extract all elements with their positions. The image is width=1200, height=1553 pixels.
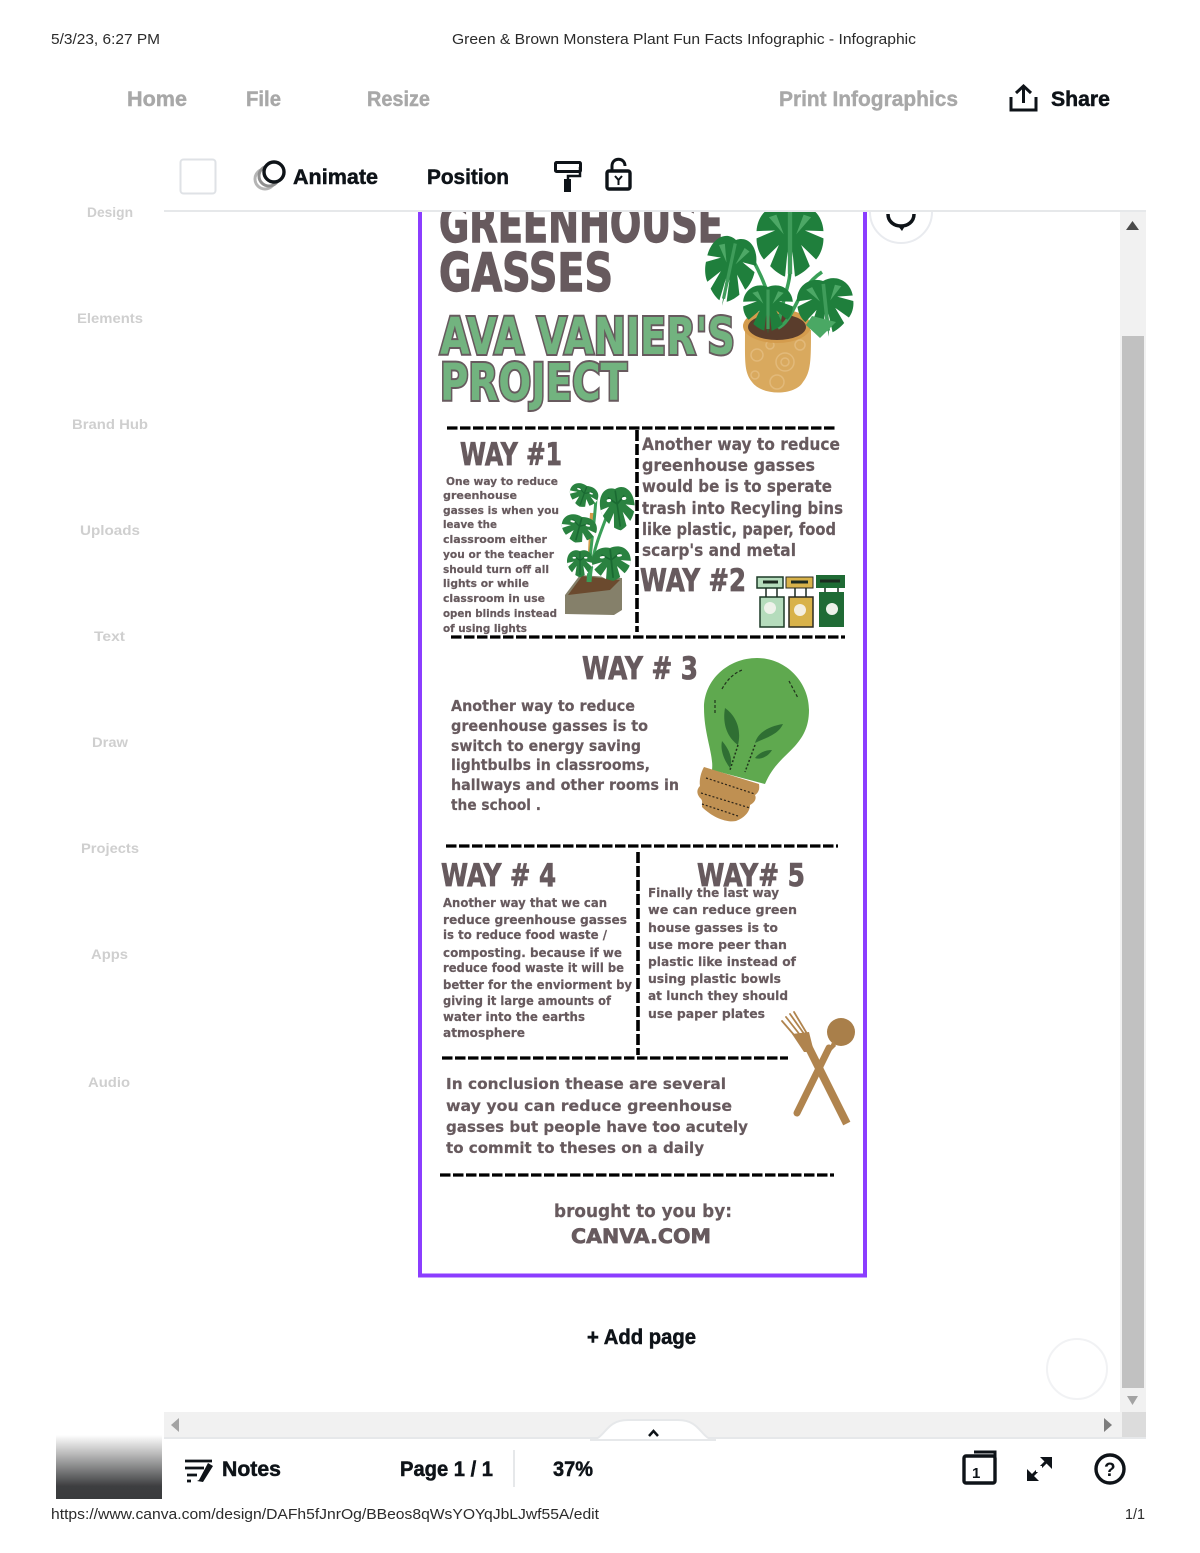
top navigation: Home [127, 88, 187, 111]
text: way 1: classroom in use [443, 592, 545, 605]
text: way 4: atmosphere [443, 1025, 525, 1040]
text: way 1: leave the [443, 518, 497, 531]
text: way 5: plastic like instead of [648, 954, 797, 969]
heading: way 2: WAY #2 [640, 563, 746, 599]
subtitle: ava vanier's project: PROJECT [440, 354, 627, 413]
infographic page [420, 181, 932, 1276]
text: way 4: giving it large amounts of [443, 993, 612, 1008]
page thumbnail [56, 1435, 162, 1499]
text: way 5: using plastic bowls [648, 971, 781, 986]
text: way 3: switch to energy saving [451, 737, 641, 755]
pdf page title: Green & Brown Monstera Plant Fun Facts Infographic - Infographic [452, 31, 917, 48]
sidebar labels [72, 204, 148, 1090]
credit: brought to you by: [554, 1201, 732, 1222]
animate label: Animate [293, 166, 378, 189]
text: way 1: One way to reduce [446, 475, 558, 488]
text: way 5: house gasses is to [648, 920, 778, 935]
heading: way 5: WAY# 5 [697, 858, 805, 894]
horizontal scrollbar [164, 1412, 1146, 1440]
heading: way 3: WAY # 3 [582, 651, 698, 687]
sidebar labels: Brand Hub [72, 416, 148, 432]
text: way 4: better for the enviorment by [443, 977, 632, 992]
text: way 2: would be is to sperate [642, 477, 832, 496]
text: way 5: at lunch they should [648, 988, 788, 1003]
sidebar labels: Elements [77, 310, 143, 326]
top navigation: Resize [367, 88, 430, 111]
position label: Position [427, 166, 509, 189]
animate icon [255, 162, 284, 189]
share button [1011, 86, 1110, 111]
text: way 1: of using lights [443, 622, 527, 635]
subtitle: ava vanier's project: AVA VANIER'S [440, 308, 735, 367]
toolbar rule [164, 210, 1146, 212]
text: way 3: greenhouse gasses is to [451, 717, 648, 735]
text: way 4: is to reduce food waste / [443, 927, 607, 942]
sidebar labels: Projects [81, 840, 139, 856]
text: way 4: Another way that we can [443, 895, 607, 910]
conclusion text: way you can reduce greenhouse [446, 1097, 732, 1115]
text: way 5: use more peer than [648, 937, 787, 952]
text: way 2: trash into Recyling bins [642, 499, 843, 518]
conclusion text: to commit to theses on a daily [446, 1139, 704, 1157]
text: way 4 [443, 895, 632, 1040]
panel: way 1 [443, 437, 638, 635]
conclusion text: In conclusion thease are several [446, 1075, 726, 1093]
credit [555, 1203, 730, 1244]
text: way 4: reduce food waste it will be [443, 960, 624, 975]
heading: way 4: WAY # 4 [441, 858, 556, 894]
pdf url footer: https://www.canva.com/design/DAFh5fJnrOg/BBeos8qWsYOYqJbLJwf55A/edit [51, 1506, 600, 1523]
text: way 4: reduce greenhouse gasses [443, 912, 627, 927]
top navigation: File [246, 88, 281, 111]
sidebar labels: Audio [88, 1074, 130, 1090]
sidebar labels: Text [94, 628, 125, 644]
sidebar labels: Draw [92, 734, 128, 750]
illustration: plant in square planter [558, 480, 638, 615]
share button: Share [1051, 88, 1110, 111]
credit: CANVA.COM [571, 1225, 711, 1248]
pdf print date: 5/3/23, 6:27 PM [51, 31, 160, 48]
icon: lock [607, 159, 630, 189]
text: way 2: greenhouse gasses [642, 456, 815, 475]
text: way 2: scarp's and metal [642, 541, 796, 560]
title: greenhouse gasses: GASSES [439, 243, 613, 304]
text: way 1: lights or while [443, 577, 529, 590]
illustration: green lightbulb [697, 658, 809, 821]
sidebar labels: Apps [91, 946, 128, 962]
icon: recycling bins [757, 575, 845, 627]
page indicator: Page 1 / 1 [400, 1458, 493, 1481]
text: way 1 [443, 475, 559, 635]
top navigation: Print Infographics [779, 88, 958, 111]
text: way 3: hallways and other rooms in [451, 776, 679, 794]
subtitle: ava vanier's project [440, 308, 735, 413]
illustration: potted monstera [698, 205, 857, 392]
pdf page number: 1/1 [1125, 1506, 1145, 1523]
text: way 2: like plastic, paper, food [642, 520, 836, 539]
text: way 1: gasses is when you [443, 504, 559, 517]
icon: notes [185, 1461, 213, 1482]
panel: way 5 [648, 858, 805, 1021]
icon: page count: 1 [972, 1465, 980, 1482]
icon: paint roller [556, 162, 580, 192]
sidebar labels: Uploads [80, 522, 140, 538]
text: way 5 [648, 885, 797, 1021]
purple selection frame [420, 190, 865, 1276]
text: way 4: water into the earths [443, 1009, 585, 1024]
panel: way 4 [441, 858, 632, 1040]
text: way 3 [451, 697, 679, 814]
icon: page count [964, 1452, 995, 1483]
text: way 3: lightbulbs in classrooms, [451, 756, 650, 774]
text: way 5: we can reduce green [648, 902, 797, 917]
panel: way 2 [640, 435, 845, 627]
toolbar [180, 159, 630, 194]
icon: floating comment button [869, 212, 933, 244]
heading: way 1: WAY #1 [460, 437, 562, 473]
icon: expand [1027, 1457, 1052, 1481]
icon: help: ? [1104, 1460, 1116, 1481]
sidebar labels: Design [87, 204, 133, 220]
icon: wooden fork and spoon [782, 1012, 855, 1120]
text: way 3: the school . [451, 796, 541, 814]
text: way 1: classroom either [443, 533, 548, 546]
text: way 2: Another way to reduce [642, 435, 840, 454]
top navigation [127, 88, 958, 111]
color swatch [180, 160, 216, 194]
conclusion text [446, 1075, 748, 1157]
text: way 5: use paper plates [648, 1006, 765, 1021]
panel: way 3 [451, 651, 809, 821]
conclusion text: gasses but people have too acutely [446, 1118, 748, 1136]
text: way 5: Finally the last way [648, 885, 779, 900]
text: way 1: you or the teacher [443, 548, 555, 561]
zoom level: 37% [553, 1458, 593, 1481]
text: way 2 [642, 435, 843, 560]
add page button: + Add page [587, 1326, 696, 1349]
divider dashes [440, 428, 845, 1175]
title: greenhouse gasses: GREENHOUSE [439, 194, 723, 255]
bottom bar [185, 1450, 1124, 1487]
vertical scrollbar [1120, 212, 1146, 1412]
text: way 1: greenhouse [443, 489, 517, 502]
text: way 1: should turn off all [443, 563, 549, 576]
text: way 1: open blinds instead [443, 607, 557, 620]
text: way 4: composting. because if we [443, 945, 622, 960]
title: greenhouse gasses [440, 212, 721, 292]
floating help circle [1047, 1339, 1107, 1399]
icon: help [1096, 1455, 1124, 1483]
text: way 3: Another way to reduce [451, 697, 635, 715]
notes label: Notes [222, 1458, 281, 1481]
